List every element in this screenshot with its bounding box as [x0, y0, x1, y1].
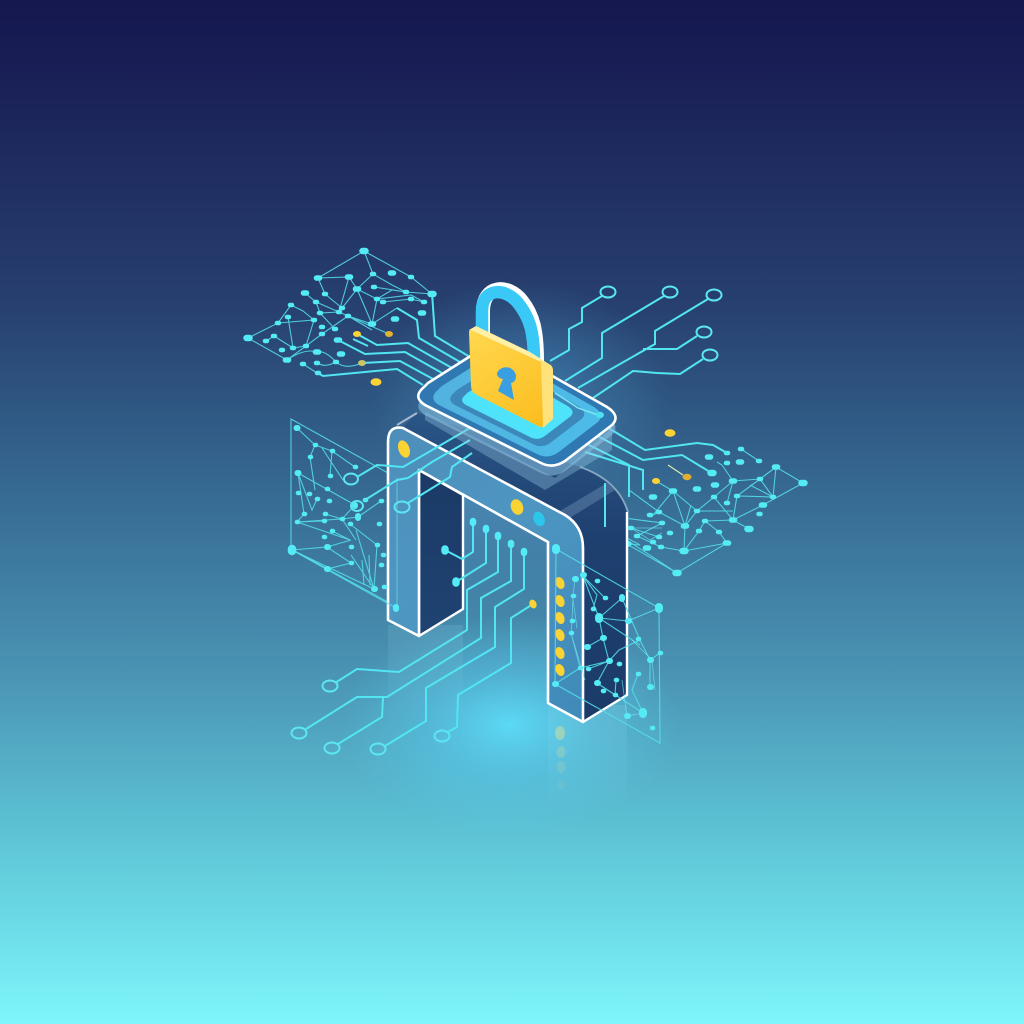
- gate: top and right dark face: [402, 413, 627, 722]
- icon: padlock: [469, 289, 553, 427]
- gate: inner back wall: [463, 495, 548, 650]
- gate: inner dark side of opening: [419, 470, 463, 636]
- ring outer: [433, 354, 601, 456]
- ring middle: [450, 364, 584, 446]
- platform top surface: [418, 345, 616, 466]
- circuit traces: bottom from gate pins: [292, 521, 538, 754]
- panel: left network frame: [291, 419, 397, 607]
- glow behind lock: [370, 280, 670, 520]
- gate floor reflections: [388, 625, 627, 815]
- padlock shackle: [482, 289, 537, 362]
- platform: glass base with concentric rings: [418, 345, 616, 476]
- padlock front: [469, 330, 543, 427]
- gate: top face highlights: [397, 413, 628, 519]
- padlock top face: [469, 326, 552, 366]
- ring inner: [462, 372, 573, 439]
- lower-right trace over dark face: [604, 483, 606, 527]
- platform side thickness: [418, 355, 616, 476]
- gate: indicator lights: [396, 439, 547, 528]
- padlock keyhole: [497, 367, 516, 400]
- network: lower right panel: [555, 548, 661, 743]
- network: right: [606, 429, 804, 573]
- network: upper left: [246, 251, 434, 373]
- gate: right dark face edge: [583, 512, 627, 722]
- circuit traces: upper left: [318, 293, 470, 386]
- platform trace ends: [555, 393, 601, 416]
- network: left panel nodes: [292, 428, 472, 609]
- padlock right side: [540, 360, 553, 427]
- gate: front arch face: [388, 428, 583, 722]
- gate: yellow LED column: [554, 576, 566, 677]
- circuit traces: right of platform: [585, 423, 727, 497]
- circuit traces: upper right with terminals: [550, 286, 722, 398]
- platform: soft underside: [425, 412, 612, 490]
- light glow beneath gate: [340, 615, 680, 835]
